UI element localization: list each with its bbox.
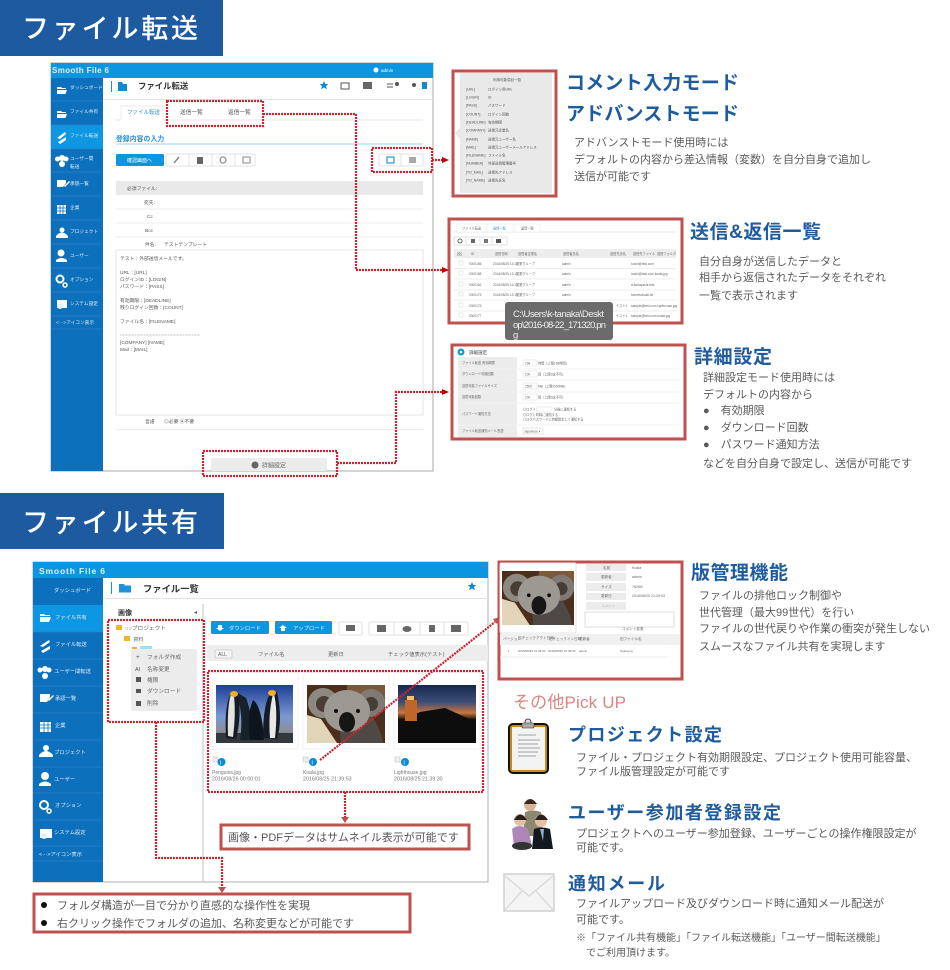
panel: detail settings: パスワード通知方法 <box>462 411 491 416</box>
table header: 更新日 <box>328 650 344 658</box>
panel: detail settings: ◎ログと同時に通知する <box>523 412 558 417</box>
icon: clipboard <box>509 719 548 773</box>
table header: ファイル名 <box>258 650 284 658</box>
detail settings button <box>211 458 327 471</box>
panel: send and reply list: sample@test.com lighthouse.jpg <box>631 304 677 308</box>
tooltip: file path: g <box>513 330 518 341</box>
panel: comment variable list: [NAME] <box>466 138 478 142</box>
panel: version management: admin <box>632 575 642 579</box>
icon: users <box>512 799 553 850</box>
sidebar navigation <box>33 578 103 882</box>
panel: send and reply list <box>449 219 682 323</box>
panel: version management: 更新者 <box>579 636 590 641</box>
tabs: 送信一覧 <box>180 108 203 116</box>
panel: version management: 更新日 <box>601 593 612 598</box>
heading: comment and advanced mode <box>566 72 739 125</box>
panel: send and reply list: 営業グループ <box>516 271 536 276</box>
folder tree panel <box>116 604 203 882</box>
screenshot: file transfer screen: Smooth File 6 <box>52 66 110 75</box>
folder tree panel: ○○プロジェクト <box>125 625 166 632</box>
panel: send and reply list: 2016/08/25 13:13 <box>493 293 518 297</box>
thumbnail: koala <box>303 673 389 749</box>
sidebar navigation: ダッシュボード <box>54 586 91 594</box>
file labels: Penguins.jpg <box>212 770 241 776</box>
panel: comment variable list: [DEADLINE] <box>466 120 485 124</box>
sidebar navigation: 承認一覧 <box>70 180 89 187</box>
panel: send and reply list: 0000186 <box>469 262 482 266</box>
tooltip: file path: op\2016-08-22_171320.pn <box>513 320 606 331</box>
panel: detail settings: 168 <box>525 362 531 366</box>
heading: notification mail: 通知メール <box>568 874 665 894</box>
file labels: i <box>312 760 313 766</box>
panel: comment variable list: 利用可能項目一覧 <box>493 77 521 82</box>
text: detail settings description: ● 有効期限 <box>703 403 765 417</box>
text: version management description <box>699 588 930 653</box>
panel: detail settings: ◎ログパスワードに自動設定して通知する <box>523 416 583 422</box>
sidebar navigation: 転送 <box>70 163 80 170</box>
sidebar navigation: ファイル転送 <box>70 132 98 139</box>
panel: comment variable list: ID <box>488 96 492 100</box>
panel: version management: 2016/08/25 21:39:53 <box>548 649 576 653</box>
page header bar <box>103 81 433 100</box>
panel: detail settings: MB（上限2500MB） <box>538 384 567 388</box>
heading: comment and advanced mode: コメント入力モード <box>566 72 739 94</box>
context menu <box>131 649 197 711</box>
text: detail settings description: などを自分自身で設定し、送信が可能です <box>703 456 912 470</box>
detail settings button: 詳細設定 <box>262 462 286 470</box>
panel: detail settings: 100 <box>525 396 531 400</box>
toolbar <box>116 154 423 166</box>
tabs: ファイル転送 <box>127 108 161 116</box>
file labels: i <box>404 760 405 766</box>
text: advanced mode description: 送信が可能です <box>574 169 651 183</box>
sidebar navigation: システム設定 <box>54 829 86 836</box>
panel: comment variable list: [NUMBER] <box>466 162 483 166</box>
text: user registration description: プロジェクトへのユーザー参加登録、ユーザーごとの操作権限設定が <box>576 826 916 840</box>
sidebar navigation: ファイル転送 <box>55 640 87 648</box>
mail body textarea: ◎必要 ⦿不要 <box>164 418 194 425</box>
mail body textarea <box>116 250 423 430</box>
form rows <box>116 181 423 248</box>
panel: version management: admin <box>579 649 588 653</box>
sidebar navigation: プロジェクト <box>70 229 98 235</box>
panel: version management: 旧ファイル名 <box>620 636 642 641</box>
panel: send and reply list: [全] <box>457 251 462 256</box>
panel: send and reply list: sample@test.com koala.jpg <box>631 314 670 318</box>
panel: version management: サイズ <box>601 584 612 589</box>
folder tree panel: 資料 <box>133 635 143 643</box>
callouts and connectors: file transfer <box>167 101 449 476</box>
panel: comment variable list: 送信先氏名 <box>488 178 506 182</box>
toolbar: 確認画面へ <box>127 157 152 164</box>
panel: detail settings: ◎ログイン <box>523 406 539 412</box>
text: notification mail description: ファイルアップロード及びダウンロード時に通知メール配送が <box>576 896 884 910</box>
screenshot: file transfer screen <box>51 63 433 471</box>
heading: detail settings: 詳細設定 <box>694 345 772 368</box>
panel: send and reply list: 営業グループ <box>516 261 536 266</box>
panel: send and reply list: ID <box>471 252 475 256</box>
panel: send and reply list: 返信一覧 <box>521 226 535 230</box>
callout: folder structure notes: 右クリック操作でフォルダの追加、名称変更などが可能です <box>57 916 354 930</box>
text: user registration description: 可能です。 <box>576 840 630 854</box>
panel: send and reply list: 0000177 <box>469 314 482 318</box>
panel: comment variable list: [MAIL] <box>466 146 476 150</box>
panel: comment variable list: 有効期限 <box>488 120 502 124</box>
panel: detail settings: ダウンロード可能回数 <box>462 371 495 376</box>
panel: send and reply list: 営業グループ <box>516 282 536 287</box>
panel: version management: Koala.jpg <box>620 649 633 653</box>
sidebar navigation: ユーザー <box>54 776 75 783</box>
panel: comment variable list: [TO_MAIL] <box>466 170 483 174</box>
tooltip: file path <box>505 302 613 341</box>
panel: send and reply list: 2016/08/25 13:13 <box>493 283 518 287</box>
panel: send and reply list: テスト1 <box>616 303 628 308</box>
callout: folder structure notes: フォルダ構造が一目で分かり直感的な操作性を実現 <box>57 898 310 912</box>
heading: send and reply list: 送信&返信一覧 <box>690 221 821 243</box>
panel: version management: コメント変更 <box>622 626 644 631</box>
panel: send and reply list: hoshi@test.com <box>631 262 654 266</box>
sidebar navigation: 承認一覧 <box>55 694 77 702</box>
sidebar navigation: ユーザー <box>70 253 89 259</box>
thumbnail: lighthouse <box>394 673 480 749</box>
panel: version management: コメント <box>601 604 616 608</box>
panel: send and reply list: 0000175 <box>469 304 482 308</box>
text: notification mail description: でご利用頂けます。 <box>586 946 675 959</box>
callout: thumbnail display: 画像・PDFデータはサムネイル表示が可能です <box>228 830 459 844</box>
file labels <box>212 757 443 782</box>
panel: detail settings: 分後に通知する <box>554 406 576 412</box>
context menu: 削除 <box>147 699 159 707</box>
panel: comment variable list: [LOGIN] <box>466 96 479 100</box>
panel: send and reply list: admin <box>562 283 571 287</box>
panel: version management: 旧チェックアウト日時 <box>518 635 554 640</box>
panel: send and reply list: a-kobayashi-test <box>631 283 655 287</box>
panel: send and reply list: 送信一覧 <box>493 226 507 230</box>
panel: version management: 名前 <box>603 565 611 570</box>
file labels: Lighthouse.jpg <box>394 770 427 776</box>
panel: detail settings <box>452 345 685 439</box>
panel: send and reply list: 送信者氏名 <box>563 251 579 256</box>
panel: detail settings: ファイル転送通知メール言語 <box>462 428 504 433</box>
panel: send and reply list: 送信先氏名 <box>610 251 626 256</box>
text: detail settings description: ● パスワード通知方法 <box>703 437 820 451</box>
section title: 登録内容の入力 <box>116 134 164 143</box>
title: ファイル転送: ファイル転送 <box>22 14 198 44</box>
sidebar navigation: ファイル共有 <box>55 613 87 621</box>
text: project settings description: ファイル版管理設定が可能です <box>576 764 730 778</box>
panel: detail settings: 詳細設定 <box>469 349 487 356</box>
mail body textarea: 有効期限：[DEADLINE] <box>120 297 171 304</box>
callout: folder structure notes <box>34 894 410 932</box>
text: detail settings description <box>703 370 912 470</box>
text: project settings description: ファイル・プロジェクト有効期限設定、プロジェクト使用可能容量、 <box>576 750 917 764</box>
panel: comment variable list: パスワード <box>488 102 506 108</box>
heading: user registration settings: ユーザー参加者登録設定 <box>568 803 781 823</box>
sidebar navigation: <···>アイコン表示 <box>56 319 94 326</box>
context menu: AI <box>135 667 141 673</box>
panel: comment variable list: 外部送信管理番号 <box>488 160 516 166</box>
panel: send and reply list: 0000182 <box>469 283 482 287</box>
text: version management description: ファイルの排他ロック制御や <box>699 588 842 602</box>
sidebar navigation: システム設定 <box>70 300 98 307</box>
text: notification mail description <box>576 896 886 959</box>
title: ファイル転送 <box>0 0 223 56</box>
text: advanced mode description <box>574 136 871 183</box>
text: detail settings description: 詳細設定モード使用時には <box>703 370 835 384</box>
panel: comment variable list: [COUNT] <box>466 112 480 116</box>
panel: send and reply list: hoshi@test.com koala.jpg <box>631 272 668 276</box>
panel: version management: 旧チェックイン日時 <box>549 636 582 641</box>
panel: version management: 更新者 <box>601 574 612 579</box>
sidebar navigation: ユーザー間転送 <box>54 667 92 675</box>
context menu: 権限 <box>147 676 159 684</box>
panel: detail settings: ファイル転送 有効期限 <box>462 360 496 365</box>
panel: send and reply list: admin <box>562 272 571 276</box>
thumbnail: penguin <box>212 673 298 749</box>
panel: comment variable list: ログイン回数 <box>488 112 509 116</box>
panel: comment variable list: 送信元企業名 <box>488 128 509 132</box>
text: send and reply description <box>699 254 886 302</box>
mail body textarea: ファイル名：[FILENAME] <box>120 318 175 325</box>
panel: version management: 2016/08/25 21:39:53 <box>518 649 546 653</box>
mail body textarea: パスワード：[PASS] <box>120 284 164 290</box>
screenshot: file list screen <box>33 562 488 882</box>
toolbar: ダウンロード <box>229 624 261 632</box>
form rows: 件名: <box>145 241 156 248</box>
file labels: 2016/08/26 00:00:01 <box>212 776 261 782</box>
folder tree panel: ◂ <box>194 610 197 616</box>
sidebar navigation: <···>アイコン表示 <box>39 850 82 858</box>
panel: send and reply list: 送信者企業名 <box>518 251 537 256</box>
tooltip: file path: C:\Users\k-tanaka\Deskt <box>513 309 604 320</box>
panel: comment variable list: ログイン用URL <box>488 86 513 92</box>
panel: send and reply list: 2016/08/25 13:13 <box>493 262 518 266</box>
text: send and reply description: 一覧で表示されます <box>699 289 798 302</box>
heading: comment and advanced mode: アドバンストモード <box>566 103 739 125</box>
page header bar <box>103 582 488 598</box>
panel: send and reply list: テスト1 <box>616 313 628 318</box>
sidebar navigation: 企業 <box>70 204 80 211</box>
text: send and reply description: 相手から返信されたデータをそれぞれ <box>699 270 886 284</box>
callout: thumbnail display <box>221 825 469 849</box>
panel: comment variable list: [URL] <box>466 88 475 92</box>
panel: send and reply list: 送信日時 <box>495 251 509 256</box>
panel: send and reply list: 営業グループ <box>516 292 536 297</box>
page header bar: ファイル転送 <box>138 81 189 91</box>
panel: send and reply list: 0000188 <box>469 272 482 276</box>
panel: comment variable list: ファイル名 <box>488 152 506 158</box>
panel: send and reply list: 送信先ファイル <box>633 251 656 256</box>
text: detail settings description: ● ダウンロード回数 <box>703 420 809 434</box>
panel: detail settings: 回（上限0は不可） <box>538 372 565 376</box>
tabs <box>116 106 423 120</box>
screenshot: file transfer screen: admin <box>381 68 394 73</box>
panel: detail settings: 時間（上限168時間） <box>538 360 569 366</box>
file labels: 2016/08/25 21:39:53 <box>303 776 352 782</box>
panel: version management: 762KB <box>632 585 643 589</box>
sidebar navigation <box>51 78 103 471</box>
sidebar navigation: ファイル共有 <box>70 108 98 115</box>
toolbar: アップロード <box>293 625 325 632</box>
page header bar: ファイル一覧 <box>143 583 199 594</box>
table header: ALL <box>218 652 227 658</box>
panel: detail settings: 回（上限0は不可） <box>538 394 565 400</box>
text: notification mail description: 可能です。 <box>576 912 630 926</box>
panel: version management: 2016/08/25 21:39:53 <box>632 594 665 598</box>
panel: comment variable list: [COMPANY] <box>466 128 485 132</box>
panel: comment variable list: 送信元ユーザーメールアドレス <box>488 144 537 150</box>
table header: チェック値表示(テスト) <box>388 650 445 658</box>
context menu: ダウンロード <box>147 687 181 695</box>
title: ファイル共有 <box>0 493 224 549</box>
panel: comment variable list <box>453 71 556 196</box>
sidebar navigation: プロジェクト <box>54 749 86 756</box>
panel: comment variable list: 送信元ユーザー名 <box>488 136 516 142</box>
file labels: i <box>220 760 221 766</box>
sidebar navigation: 企業 <box>55 721 66 729</box>
text: version management description: 世代管理（最大99世代）を行い <box>699 605 854 619</box>
file labels: Koala.jpg <box>303 770 324 776</box>
sidebar navigation: ユーザー間 <box>70 156 94 162</box>
text: advanced mode description: アドバンストモード使用時には <box>574 136 728 149</box>
screenshot: file list screen: Smooth File 6 <box>39 566 105 576</box>
panel: send and reply list: fumetsutsuki.txt <box>631 293 653 297</box>
form rows: Cc <box>147 214 153 220</box>
panel: version management <box>499 562 682 679</box>
mail body textarea: テスト：外部送信メールです。 <box>120 255 187 262</box>
mail body textarea: ログインID：[LOGIN] <box>120 276 166 283</box>
panel: version management: Koala <box>632 566 641 570</box>
text: user registration description <box>576 826 916 854</box>
mail body textarea: Mail：[MAIL] <box>120 347 147 353</box>
form rows: 宛先: <box>144 199 155 206</box>
heading: project settings: プロジェクト設定 <box>568 725 722 745</box>
sidebar navigation: ダッシュボード <box>70 84 103 91</box>
tabs: 返信一覧 <box>228 108 251 116</box>
panel: send and reply list: 0000175 <box>469 293 482 297</box>
heading: other pick up: その他Pick UP <box>513 693 626 712</box>
file labels: 2016/08/25 21:39:30 <box>394 776 443 782</box>
toolbar <box>211 621 468 635</box>
panel: detail settings: 送信可能ファイルサイズ <box>462 383 498 388</box>
icon: envelope <box>504 874 554 911</box>
form rows: 必須ファイル: <box>127 185 157 192</box>
panel: detail settings: 100 <box>525 372 531 376</box>
sidebar navigation: オプション <box>55 802 82 809</box>
context menu: 名称変更 <box>147 665 170 673</box>
mail body textarea: 言語 <box>145 419 155 425</box>
panel: comment variable list: [PASS] <box>466 104 477 108</box>
text: project settings description <box>576 750 917 778</box>
text: notification mail description: ※「ファイル共有機能」「ファイル転送機能」「ユーザー間転送機能」 <box>576 931 886 944</box>
panel: send and reply list: ファイル転送 <box>462 226 482 230</box>
mail body textarea: 残りログイン回数：[COUNT] <box>120 304 183 311</box>
heading: version management: 版管理機能 <box>691 561 788 584</box>
panel: comment variable list: 送信先アドレス <box>488 170 513 174</box>
panel: comment variable list: [TO_NAME] <box>466 178 485 182</box>
text: advanced mode description: デフォルトの内容から差込情報（変数）を自分自身で追加し <box>574 152 871 166</box>
title: ファイル共有: ファイル共有 <box>22 508 198 538</box>
form rows: テストテンプレート <box>164 242 207 248</box>
mail body textarea: URL：[URL] <box>120 270 147 276</box>
panel: version management: バージョン <box>503 637 521 641</box>
text: version management description: スムースなファイル共有を実現します <box>699 639 885 653</box>
panel: detail settings: 送信可能回数 <box>462 394 482 399</box>
context menu: + <box>136 654 140 661</box>
panel: detail settings: Japanese ▾ <box>524 430 541 434</box>
text: version management description: ファイルの世代戻りや作業の衝突が発生しない <box>699 621 930 635</box>
panel: comment variable list: [FILENAME] <box>466 154 485 158</box>
panel: send and reply list: admin <box>562 262 571 266</box>
panel: send and reply list: 2016/08/25 13:13 <box>493 272 518 276</box>
text: detail settings description: デフォルトの内容から <box>703 387 813 401</box>
mail body textarea: [COMPANY] [NAME] <box>120 340 164 346</box>
panel: send and reply list: 送信フォルダ <box>657 251 677 256</box>
form rows: Bcc <box>145 228 154 234</box>
panel: detail settings: 2500 <box>525 384 532 388</box>
folder tree panel: 画像 <box>118 608 132 617</box>
sidebar navigation: オプション <box>70 277 94 283</box>
callouts and connectors: file share <box>108 617 500 893</box>
context menu: フォルダ作成 <box>147 653 181 661</box>
table header <box>207 645 488 661</box>
panel: version management: 1 <box>508 649 510 653</box>
panel: send and reply list: admin <box>562 293 571 297</box>
text: send and reply description: 自分自身が送信したデータと <box>699 254 842 268</box>
